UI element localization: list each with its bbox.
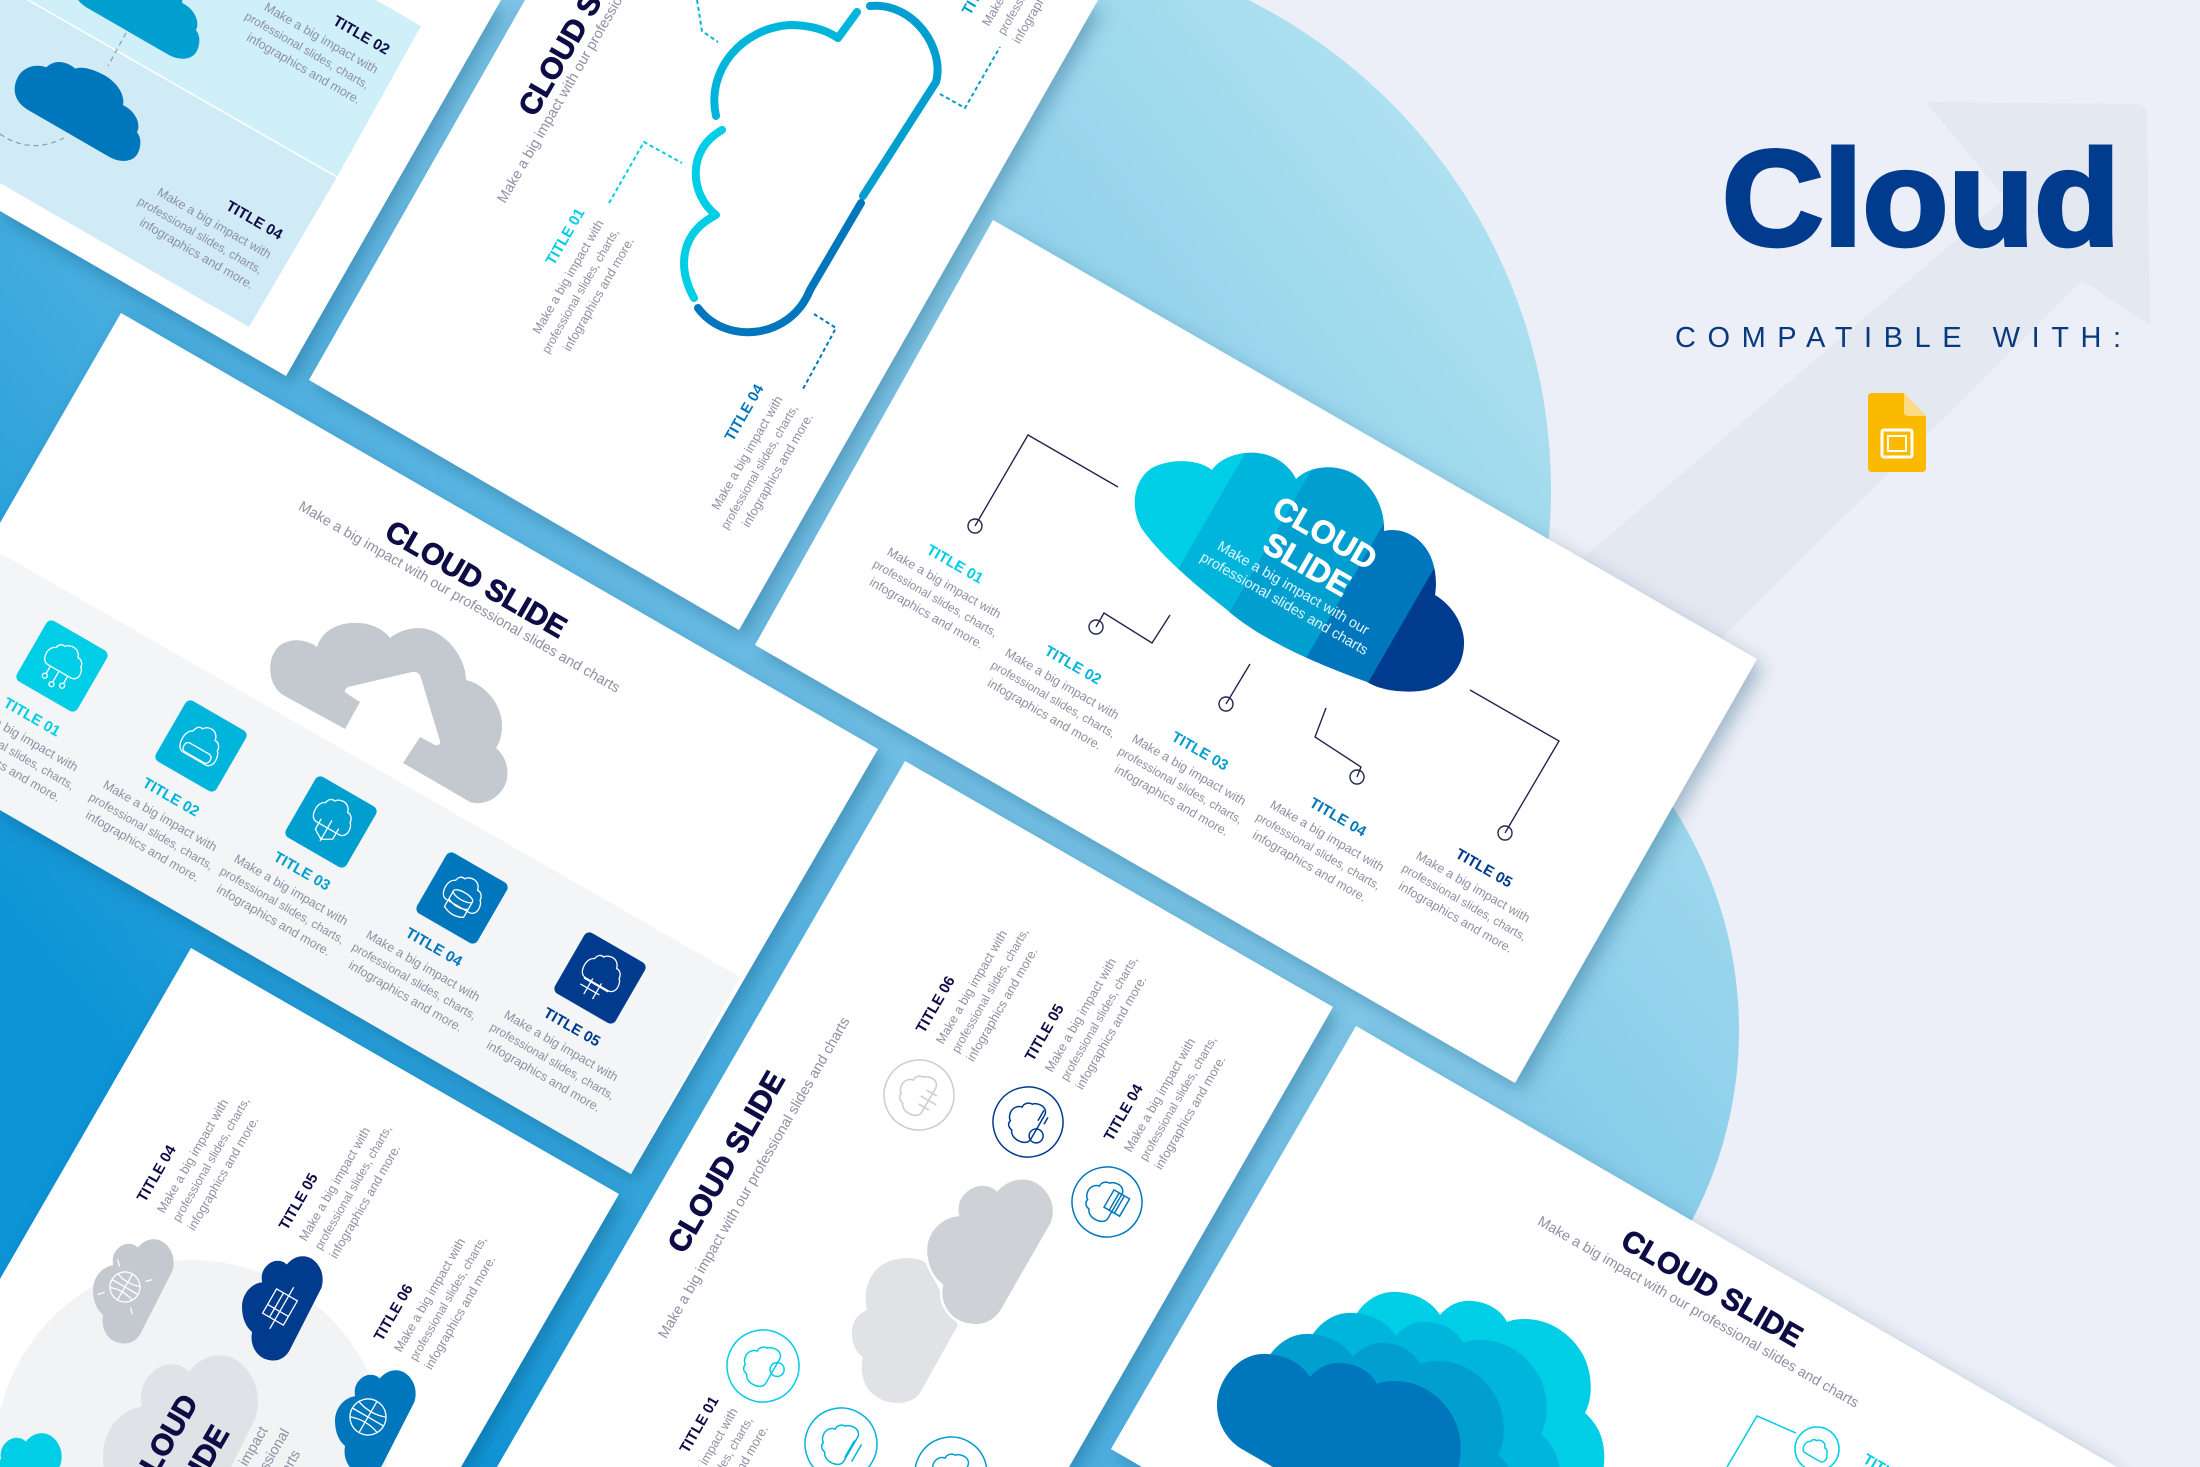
panel: slide top centre, outline cloud [309,0,1098,630]
text block: title 04: TITLE 04 [1101,1081,1147,1144]
text block: title 05: professional slides, charts, [1400,861,1529,944]
subtitle: Make a big impact with our professional slides and charts [296,499,622,696]
text block: title 05 [1022,933,1156,1092]
text block: title 04: professional slides, charts, [170,1095,253,1224]
icon square 5 [552,930,648,1026]
text block: title 05: professional slides, charts, [312,1123,395,1252]
text block: title 06: TITLE 06 [371,1281,417,1344]
text block: title 01: professional slides, charts, [871,557,1000,640]
text block: title 03: TITLE 03 [1168,728,1231,774]
grey cloud with arrow [270,623,508,803]
text block: title 05: TITLE 05 [276,1170,322,1233]
panel: slide left, five icon squares [0,313,878,1174]
icon square 3 [283,774,379,870]
panel: slide top left [0,0,501,376]
icon square 4 [414,850,510,946]
cloud heading: CLOUD [1267,489,1383,577]
dotted connectors [609,0,1000,389]
text block: title 02: Make a big impact with [262,0,380,77]
text block: title 01: professional slides, charts, [539,226,622,356]
text block: title 02: infographics and more. [985,676,1104,753]
ring icon 06 [871,1047,967,1143]
text block: title 04: Make a big impact with [364,928,482,1004]
text block: title 02 [959,0,1093,46]
heading: CLOUD SLIDE [379,515,572,645]
text block: title 02 [78,755,236,888]
title: Cloud [1722,122,2120,274]
ring icon 03 [902,1424,1000,1467]
text block: title 02: TITLE 02 [1041,642,1104,688]
panel: slide bottom centre, ring icons [497,761,1333,1467]
text block: title 03: professional slides, charts, [218,864,347,947]
text block: title 05: Make a big impact with [297,1125,373,1244]
subtitle: Make a big impact with our professional slides and charts [656,1015,853,1341]
text block: title 04: professional slides, charts, [718,402,801,532]
text block: title 05: TITLE 05 [540,1004,603,1050]
text block: title 02 [234,0,392,107]
text block: title 05: professional slides, charts, [1058,954,1141,1083]
text block: title 05: TITLE 05 [1452,845,1515,891]
text block: title 02: infographics and more. [83,808,202,885]
text block: title 06: professional slides, charts, [949,926,1032,1055]
layered clouds [1217,1292,1604,1467]
text block: title 03 [209,829,367,962]
text block: title 05 [1391,826,1549,959]
text block: title 02: infographics and more. [244,30,363,107]
connector and icon [1727,1416,1839,1467]
grey cloud light [852,1258,958,1403]
cloud subtitle: professional slides and charts [1197,549,1371,659]
text block: title 04: Make a big impact with [155,1097,231,1216]
text block: title 04: infographics and more. [739,411,816,530]
text block: title 04: TITLE 04 [1306,794,1370,841]
text block: title 04: professional slides, charts, [1254,810,1383,893]
text block: title 03: infographics and more. [214,882,333,959]
cloud icon grey [93,1239,174,1344]
icon square 1 [14,618,110,714]
text block: title 04: infographics and more. [346,958,465,1035]
connectors [968,435,1559,840]
text block: title 04: infographics and more. [185,1114,261,1233]
text block: title 04 [682,381,816,540]
text block: title 02: professional slides, charts, [87,790,216,873]
text block: title 01: TITLE 01 [923,541,986,587]
background arrow [1500,102,2150,760]
text block: title 01: infographics and more. [560,235,637,354]
icon: cloud lower [6,38,163,168]
icon: google slides [1868,393,1926,472]
outline cloud [684,6,938,332]
text block: title 01: TITLE 01 [0,694,63,740]
text block: title 05: infographics and more. [327,1142,403,1261]
text block: title 03 [1107,709,1265,842]
ring icon 01 [714,1317,812,1415]
text block: title 05: infographics and more. [1073,973,1149,1092]
centre cloud [103,1355,258,1467]
text block: title 03: Make a big impact with [232,852,350,928]
text block: title 02: TITLE 02 [139,774,202,820]
text block: title 04: infographics and more. [1250,828,1369,905]
subtitle: compatible with: COMPATIBLE WITH: [1675,322,2121,354]
panel: slide bottom left, circle of clouds [0,948,619,1467]
text block: title 05: infographics and more. [1396,879,1515,956]
text block: title 02: professional slides, charts, [242,9,372,92]
text block: title 01: infographics and more. [867,575,986,652]
panel: slide bottom right, layered clouds [1111,1026,2117,1467]
striped cloud [1135,453,1464,692]
cloud icon navy [242,1256,323,1361]
text block: title 03: TITLE 03 [270,848,333,894]
icon: cloud upper [65,0,222,66]
text block: title 05: Make a big impact with [502,1008,620,1084]
text block: title 02: TITLE 02 [330,12,392,58]
text block: title 02: professional slides, charts, [989,658,1118,741]
heading: CLOUD SLIDE [662,1066,792,1259]
icon square 2 [153,698,249,794]
text block: title 04: Make a big impact with [1122,1036,1198,1154]
text block: title 06 [371,1213,505,1372]
text block: title 04 [134,1074,268,1233]
text block: title 01: Make a big impact with [530,218,607,336]
text block: title 01 [862,522,1020,655]
text block: title 01 [0,675,97,808]
panel: slide main, cloud with five titles [755,220,1757,1083]
text block: title 04: TITLE 04 [402,924,466,971]
text block: title 04: professional slides, charts, [1137,1034,1220,1163]
text block: title 05: Make a big impact with [1414,849,1532,925]
text block: title 06: Make a big impact with [934,928,1010,1046]
heading: CLOUD SLIDE [1615,1224,1808,1354]
text block: title 04: infographics and more. [137,215,256,292]
text block: title 04: Make a big impact with [1268,798,1386,874]
background cloud shape [0,0,1739,1467]
text block: title 05 [276,1102,410,1261]
ring icon 02 [792,1395,890,1467]
subtitle: Make a big impact with our professional slides and charts [1535,1214,1861,1411]
text block: title 04: TITLE 04 [721,381,768,444]
text block: title 03: professional slides, charts, [1116,744,1245,827]
text block: title 06 [913,905,1047,1064]
text block: title 03: infographics and more. [1112,762,1231,839]
cloud icon blue [335,1370,416,1467]
text block: title 06: infographics and more. [422,1253,498,1372]
text block: title 03: Make a big impact with [1130,732,1248,808]
text block: title 06: professional slides, charts, [407,1234,490,1363]
text block: title 04: TITLE 04 [134,1142,180,1205]
cloud icon cyan [0,1433,62,1467]
text block: title 02: Make a big impact with [1003,646,1121,722]
text block: title 05: Make a big impact with [1043,956,1119,1074]
text block: title 05 [479,985,637,1118]
text block: title 04: Make a big impact with [709,394,786,512]
text block: title 01: TITLE 01 [542,206,588,268]
text block: title 05: TITLE 05 [1022,1001,1068,1064]
text block: title 04 [341,905,499,1038]
text block: title 04 [127,158,286,292]
text block: title 06: Make a big impact with [392,1236,468,1354]
text block: title 05: infographics and more. [484,1038,603,1115]
text block: title 02: Make a big impact with [101,778,219,854]
text block: title 04 [1101,1013,1235,1172]
cloud subtitle: Make a big impact with our [1214,538,1372,639]
text block: title 04: Make a big impact with [155,185,274,262]
text block: title 06: infographics and more. [964,945,1040,1064]
text block: title 01 [637,1394,771,1467]
text block: title 01: Make a big impact with [885,545,1003,621]
text block: title 01 [503,206,637,364]
text block: title 04: infographics and more. [1152,1053,1228,1172]
text block: title 01: TITLE 01 [676,1394,722,1456]
text block: title 06: TITLE 06 [913,973,959,1036]
grey cloud dark [926,1178,1054,1325]
text block: title 04: professional slides, charts, [135,194,265,277]
ring icon 05 [980,1074,1076,1170]
ring icon 04 [1059,1154,1155,1250]
text block: title 02 [980,623,1138,756]
text block: title 04 [1245,775,1403,908]
text block: title 04: TITLE 04 [223,197,286,244]
text block: title 05: professional slides, charts, [488,1020,617,1103]
cloud heading: SLIDE [1257,525,1357,603]
text block: title 04: professional slides, charts, [350,940,479,1023]
